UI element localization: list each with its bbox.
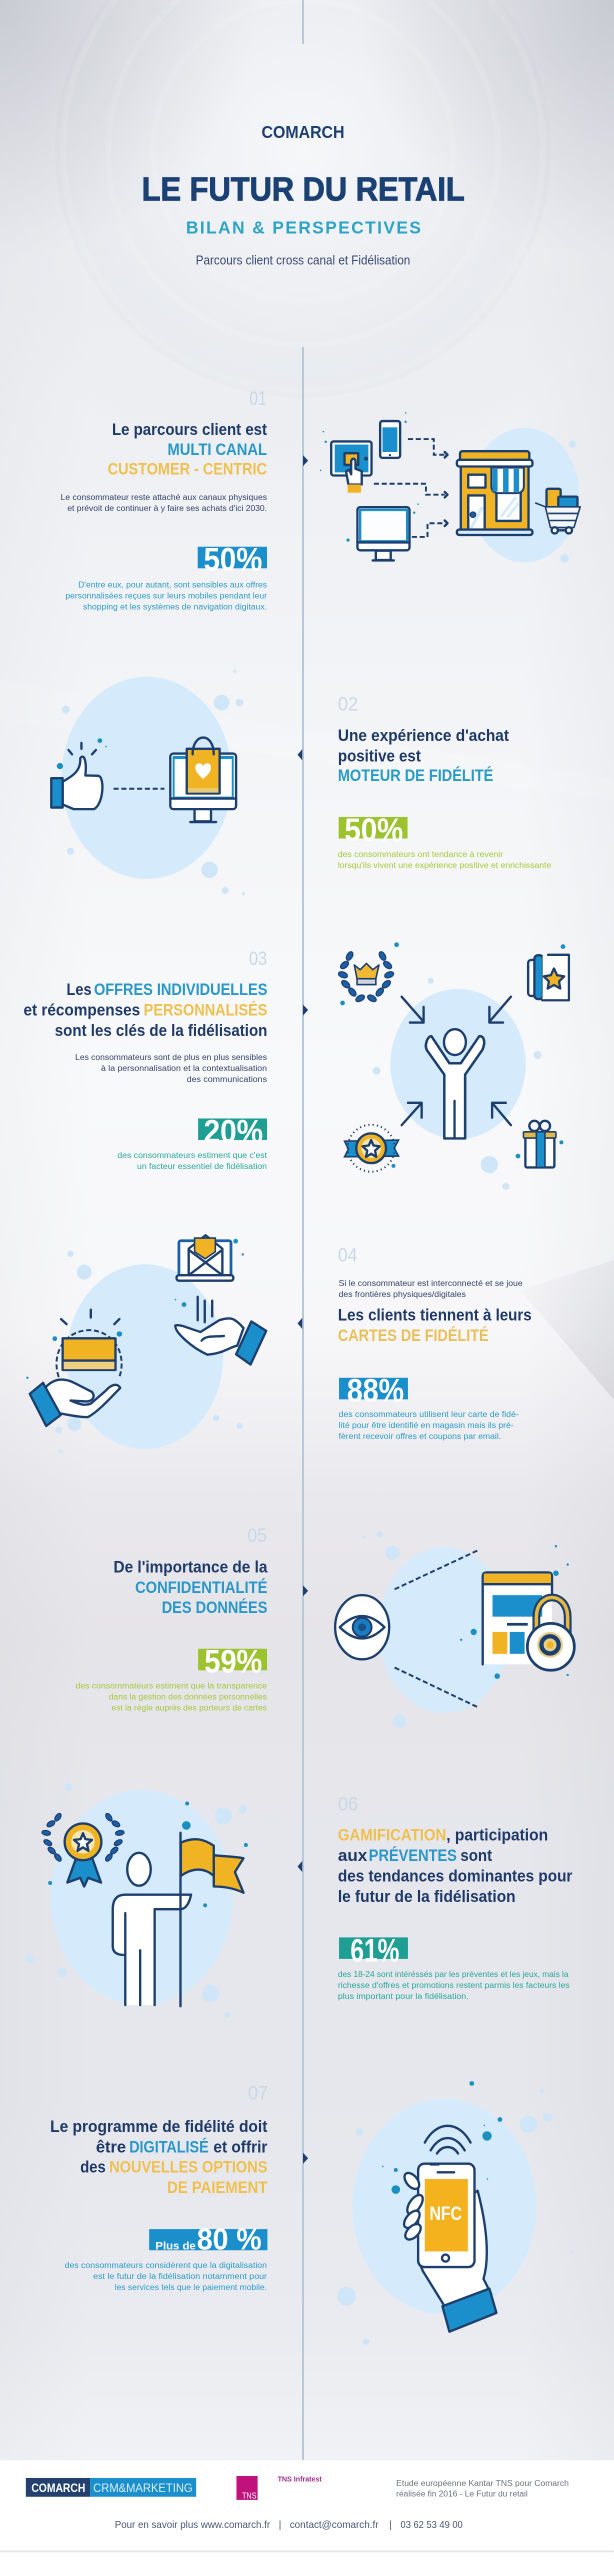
heading: sont xyxy=(460,1847,493,1865)
heading xyxy=(23,981,267,1040)
stat description xyxy=(65,580,267,611)
brand name: COMARCH xyxy=(262,122,345,142)
heading: CARTES DE FIDÉLITÉ xyxy=(338,1326,489,1345)
heading: aux xyxy=(338,1847,368,1865)
arrow marker xyxy=(303,455,308,466)
arrows pointing inward xyxy=(402,997,511,1125)
arrow marker xyxy=(298,1318,302,1329)
stat description: richesse d'offres et promotions restent parmis les facteurs les xyxy=(338,1981,570,1990)
NFC label: NFC xyxy=(429,2203,462,2225)
tagline: Parcours client cross canal et Fidélisation xyxy=(196,253,410,267)
stat description: des consommateurs ont tendance à revenir xyxy=(338,850,503,859)
arrow marker xyxy=(298,749,302,760)
stat description xyxy=(65,2261,267,2292)
icon: monitor with shopping bag xyxy=(170,738,236,822)
section number: 06 xyxy=(338,1794,358,1816)
heading: le futur de la fidélisation xyxy=(338,1888,516,1906)
panel: section 07 xyxy=(50,2081,573,2345)
icon: right hand xyxy=(175,1318,266,1364)
study source: réalisée fin 2016 - Le Futur du retail xyxy=(396,2489,528,2498)
icon: laptop with envelope xyxy=(177,1235,233,1281)
intro text: des frontières physiques/digitales xyxy=(339,1290,466,1299)
heading: GAMIFICATION xyxy=(338,1827,446,1845)
heading: et offrir xyxy=(213,2138,268,2156)
stat badge 50%: 50% xyxy=(345,812,403,848)
illustration: person with flag and medal xyxy=(26,1783,248,2018)
center timeline xyxy=(302,0,304,2460)
stat badge plus de 80%: 80 % xyxy=(197,2222,262,2256)
stat description: un facteur essentiel de fidélisation xyxy=(137,1162,267,1171)
heading: Une expérience d'achat xyxy=(338,727,509,745)
logo: TNS xyxy=(236,2474,322,2500)
panel: section 03 xyxy=(23,942,569,1190)
body text xyxy=(61,493,267,513)
heading: PERSONNALISÉS xyxy=(144,1001,267,1020)
contact line: contact@comarch.fr xyxy=(290,2520,379,2531)
logo: TNS: TNS Infratest xyxy=(278,2474,322,2483)
heading: PRÉVENTES xyxy=(369,1846,457,1865)
heading: positive est xyxy=(338,747,421,765)
contact line: Pour en savoir plus www.comarch.fr xyxy=(115,2520,271,2531)
contact line: | xyxy=(389,2520,392,2531)
section number: 07 xyxy=(248,2083,268,2105)
icon: gift box xyxy=(523,1121,556,1167)
stat description: des consommateurs considèrent que la digitalisation xyxy=(65,2261,267,2270)
arrow marker xyxy=(298,1861,302,1872)
icon: desktop monitor xyxy=(357,507,410,560)
heading: , participation xyxy=(446,1827,548,1845)
contact line: 03 62 53 49 00 xyxy=(401,2520,463,2531)
heading: De l'importance de la xyxy=(114,1558,268,1576)
stat badge 50%: 50% xyxy=(204,542,262,578)
illustration: eye and locked data xyxy=(335,1531,574,1728)
illustration: person surrounded by rewards xyxy=(338,942,569,1190)
heading: et récompenses xyxy=(23,1002,140,1020)
heading: Le parcours client est xyxy=(112,421,267,439)
arrow marker xyxy=(303,1005,308,1016)
section number: 04 xyxy=(338,1245,358,1267)
body text: et prévoit de continuer à y faire ses achats d'ici 2030. xyxy=(67,504,267,513)
logo: Comarch CRM & Marketing xyxy=(26,2478,196,2497)
icon: store xyxy=(457,451,532,535)
icon: star badge xyxy=(345,1125,399,1172)
icon: loyalty card xyxy=(57,1310,122,1377)
heading: sont les clés de la fidélisation xyxy=(55,1022,267,1040)
icon: padlock xyxy=(527,1597,574,1670)
stat description: des consommateurs estiment que la transparence xyxy=(76,1682,267,1691)
heading: CONFIDENTIALITÉ xyxy=(135,1578,267,1597)
heading: DIGITALISÉ xyxy=(129,2137,209,2156)
stat description xyxy=(76,1682,267,1713)
stat description: est le futur de la fidélisation notamment pour xyxy=(93,2272,267,2281)
stat description: des 18-24 sont intéréssés par les préventes et les jeux, mais la xyxy=(338,1970,569,1979)
stat description: des consommateurs utilisent leur carte de fidé- xyxy=(339,1410,519,1419)
dashed sight lines xyxy=(395,1550,478,1707)
stat description: lité pour être identifié en magasin mais ils pré- xyxy=(339,1421,514,1430)
arrow marker xyxy=(303,2153,308,2164)
heading: CUSTOMER - CENTRIC xyxy=(108,461,267,479)
icon: left hand xyxy=(30,1380,120,1426)
stat description: shopping et les systèmes de navigation digitaux. xyxy=(83,602,267,611)
contact line xyxy=(115,2520,463,2531)
heading: Les clients tiennent à leurs xyxy=(338,1307,532,1325)
illustration: hands exchanging card and email xyxy=(26,1235,266,1453)
heading: OFFRES INDIVIDUELLES xyxy=(94,981,267,999)
icon: medal with laurels xyxy=(42,1812,124,1886)
panel: section 01 xyxy=(61,388,580,611)
stat badge plus de 80%: Plus de xyxy=(155,2240,196,2252)
panel: section 06 xyxy=(26,1783,573,2018)
panel: section 04 xyxy=(26,1235,532,1453)
icon: eye xyxy=(335,1595,389,1659)
icon: wireless waves xyxy=(425,2126,471,2154)
icon: person with raised arms xyxy=(426,1029,484,1138)
stat badge 59%: 59% xyxy=(204,1644,262,1680)
section number: 03 xyxy=(249,948,267,970)
dashed arrows xyxy=(374,439,447,537)
icon: thumbs up xyxy=(51,738,107,809)
stat description xyxy=(338,1970,570,2001)
heading: des xyxy=(80,2159,106,2177)
heading: Les xyxy=(67,981,92,999)
study source: Etude européenne Kantar TNS pour Comarch xyxy=(396,2479,569,2488)
heading: Le programme de fidélité doit xyxy=(50,2118,268,2136)
section number: 05 xyxy=(247,1525,267,1547)
stat description xyxy=(339,1410,519,1441)
contact line: | xyxy=(279,2520,281,2531)
stat description: des consommateurs estiment que c'est xyxy=(117,1151,268,1160)
header xyxy=(142,122,465,267)
stat badge 61%: 61% xyxy=(350,1932,399,1968)
heading: des tendances dominantes pour xyxy=(338,1867,573,1885)
body text: Les consommateurs sont de plus en plus sensibles xyxy=(75,1053,267,1062)
study source xyxy=(396,2479,569,2498)
icon: shopping cart xyxy=(535,489,580,533)
main title: LE FUTUR DU RETAIL xyxy=(142,170,465,207)
stat description: plus important pour la fidélisation. xyxy=(338,1992,469,2001)
stat description xyxy=(117,1151,268,1171)
stat description: les services tels que le paiement mobile. xyxy=(115,2283,267,2292)
illustration: NFC phone payment xyxy=(337,2081,573,2345)
icon: loyalty book xyxy=(528,955,569,1000)
logo: TNS: TNS xyxy=(242,2491,256,2500)
panel: section 05 xyxy=(76,1525,574,1728)
heading xyxy=(338,1827,573,1906)
stat description: lorsqu'ils vivent une expérience positive et enrichissante xyxy=(338,861,552,870)
heading xyxy=(108,421,267,479)
heading xyxy=(50,2118,268,2197)
stat description: fèrent recevoir offres et coupons par email. xyxy=(339,1432,501,1441)
body text: à la personnalisation et la contextualisation xyxy=(101,1064,267,1073)
stat description: personnalisées reçues sur leurs mobiles pendant leur xyxy=(65,591,267,600)
icon: browser window xyxy=(483,1572,552,1664)
panel: footer xyxy=(0,2460,614,2560)
heading: MOTEUR DE FIDÉLITÉ xyxy=(338,766,493,785)
body text xyxy=(75,1053,267,1084)
icon: hand holding phone xyxy=(401,2164,496,2332)
dashed link xyxy=(114,786,164,791)
icon: flag xyxy=(181,1839,244,1893)
panel: section 02 xyxy=(51,670,552,895)
section number: 01 xyxy=(249,388,267,410)
stat description: dans la gestion des données personnelles xyxy=(109,1693,267,1702)
icon: crown with laurels xyxy=(338,951,395,1003)
logo: Comarch CRM & Marketing: COMARCH xyxy=(31,2482,85,2495)
stat badge 88%: 88% xyxy=(347,1373,404,1409)
icon: phone xyxy=(380,421,400,458)
stat badge 20%: 20% xyxy=(204,1113,263,1149)
illustration: like to shopping xyxy=(51,670,245,895)
icon: person xyxy=(113,1833,191,2006)
illustration: channels to store xyxy=(320,412,580,563)
heading xyxy=(338,727,509,785)
stat description: est la règle auprès des porteurs de cartes xyxy=(112,1704,267,1713)
body text: des communications xyxy=(187,1075,267,1084)
heading xyxy=(338,1307,532,1345)
heading: MULTI CANAL xyxy=(168,441,267,459)
section number: 02 xyxy=(338,693,358,715)
stat description xyxy=(338,850,552,870)
stat description: D'entre eux, pour autant, sont sensibles aux offres xyxy=(78,580,267,589)
intro text xyxy=(339,1279,523,1299)
stat badge plus de 80% xyxy=(149,2222,267,2256)
heading: être xyxy=(96,2138,126,2156)
heading: NOUVELLES OPTIONS xyxy=(109,2159,267,2177)
intro text: Si le consommateur est interconnecté et se joue xyxy=(339,1279,523,1288)
icon: tablet with pointing hand xyxy=(331,441,372,493)
body text: Le consommateur reste attaché aux canaux physiques xyxy=(61,493,267,502)
heading: DE PAIEMENT xyxy=(167,2179,267,2197)
subtitle: BILAN & PERSPECTIVES xyxy=(186,218,421,238)
logo: Comarch CRM & Marketing: CRM&MARKETING xyxy=(93,2482,193,2495)
arrow marker xyxy=(303,1585,308,1596)
heading: DES DONNÉES xyxy=(162,1598,267,1617)
heading xyxy=(114,1558,268,1617)
falling lines xyxy=(198,1297,212,1322)
